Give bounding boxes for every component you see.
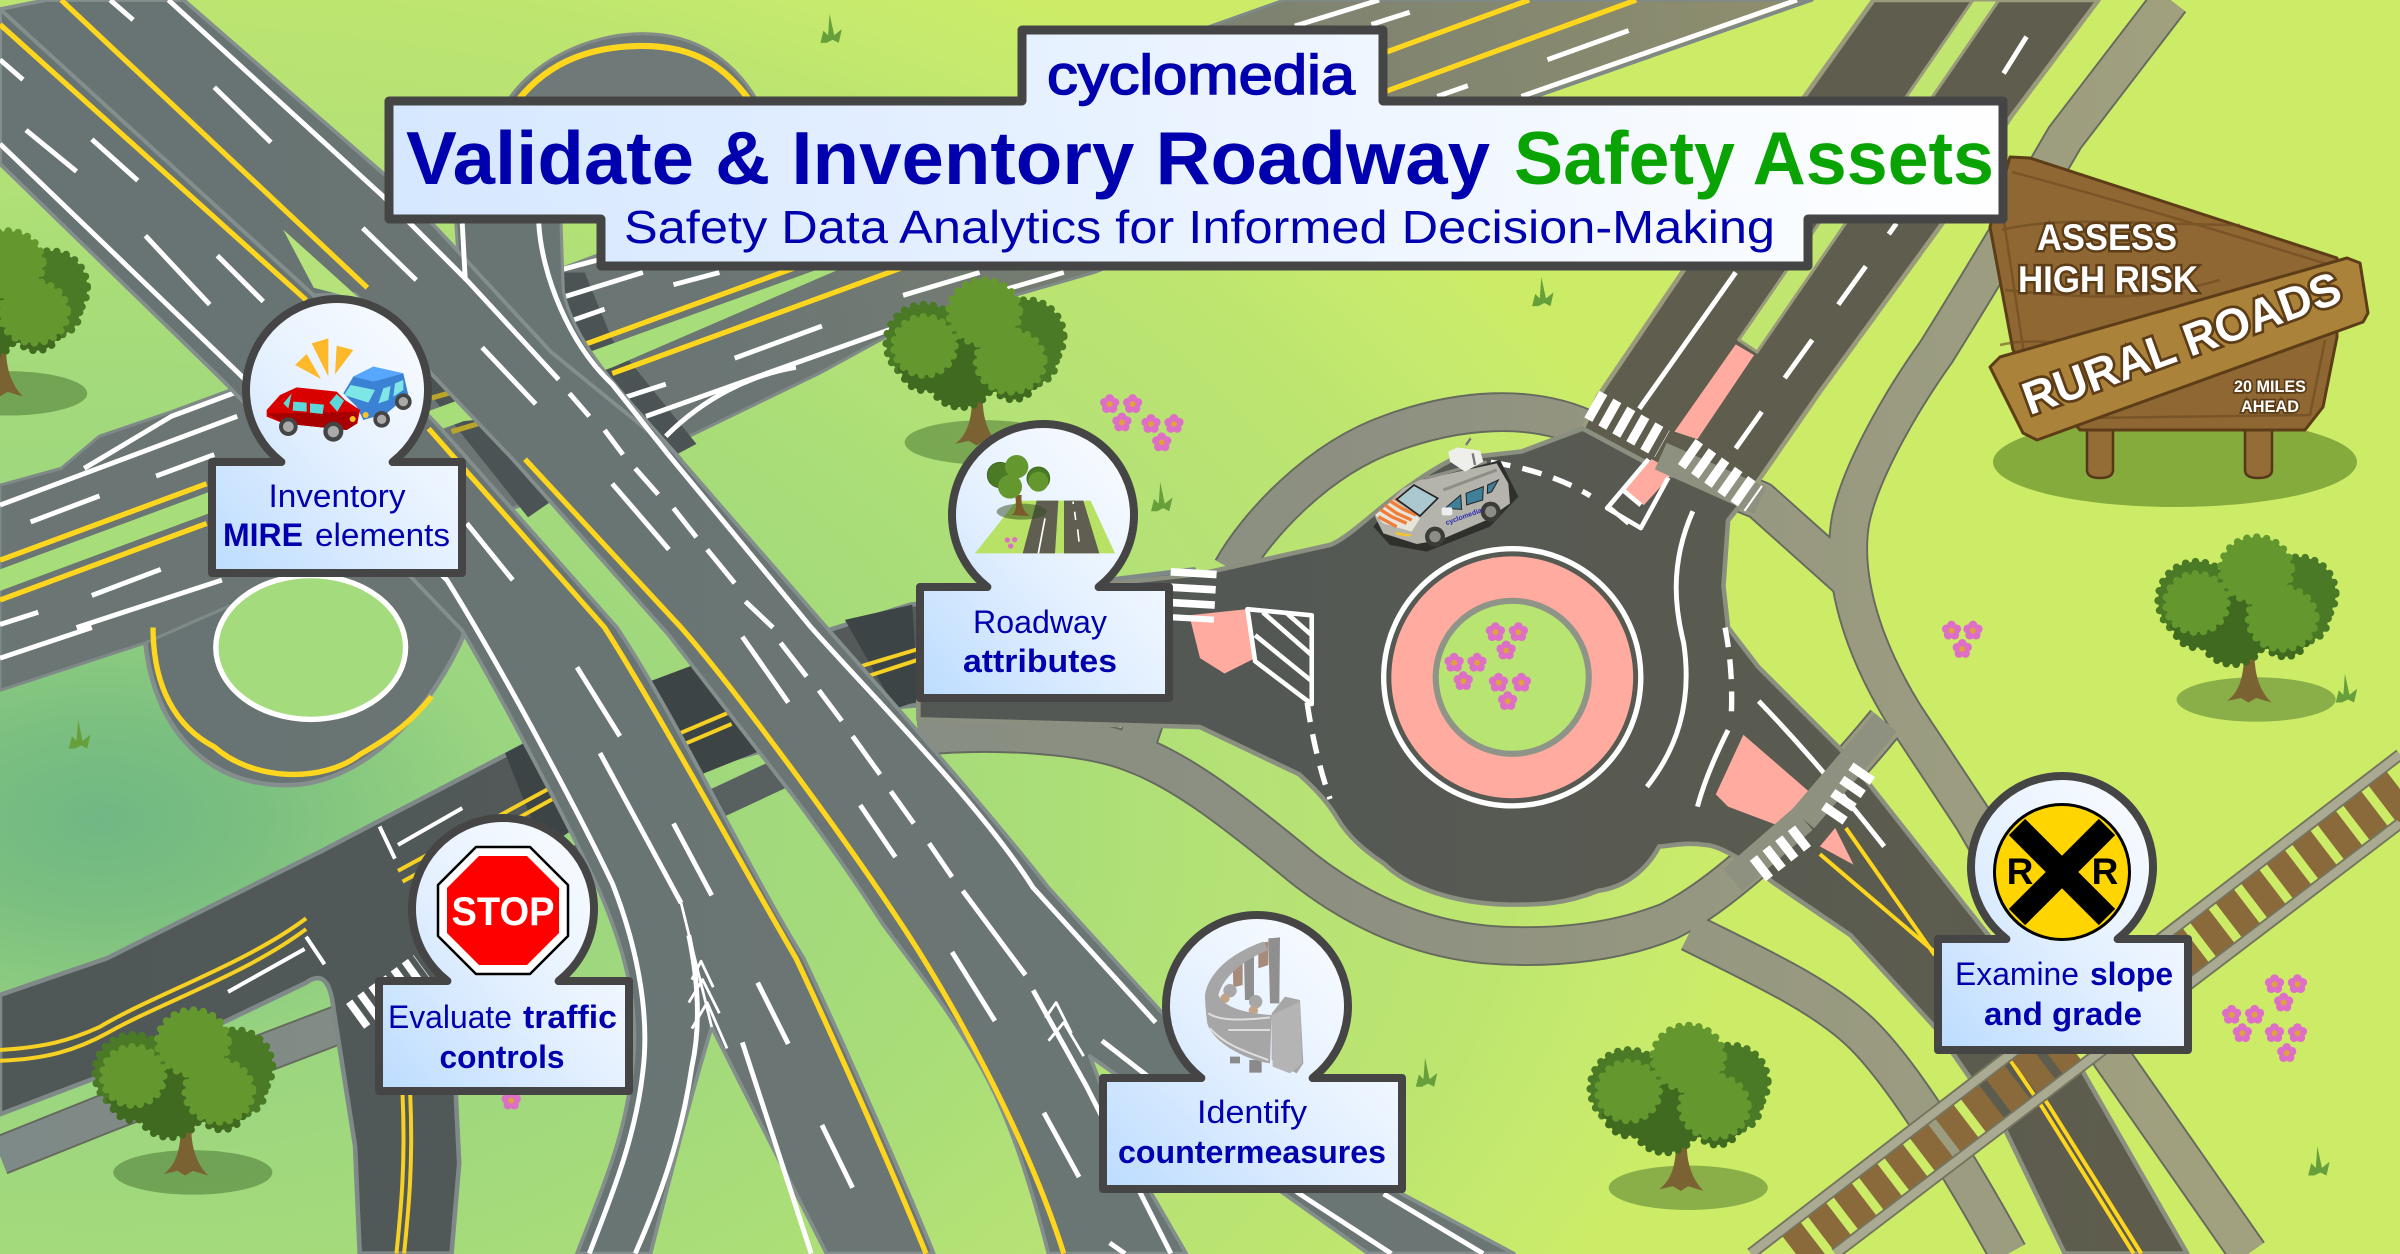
north approach road — [1561, 0, 2098, 520]
sign board — [1990, 157, 2337, 430]
highway B lane markings — [0, 0, 1797, 658]
sign text upper: ASSESS — [2037, 217, 2177, 258]
loop ramp inner green — [216, 576, 406, 719]
median sliver — [283, 230, 361, 300]
arch yellow edge — [517, 46, 750, 101]
sign small text: AHEAD — [2241, 397, 2299, 416]
arterial shadow under highway — [505, 605, 918, 849]
arterial crosswalk — [355, 967, 422, 1016]
main heading blue: Validate & Inventory Roadway — [406, 116, 1490, 200]
highway yellow lines — [0, 0, 1064, 1254]
card: Inventory MIRE elements — [212, 299, 462, 573]
ramp down to highway — [452, 153, 681, 459]
lower sidewalk under overpass — [579, 770, 788, 860]
north approach median — [1739, 0, 1999, 352]
icon: stop sign — [438, 847, 568, 974]
sign small text — [2234, 377, 2306, 416]
shaded yellow lines under overpass — [432, 392, 482, 432]
highway B median — [0, 222, 949, 591]
highway B yellow lines — [0, 0, 1636, 600]
card: Evaluate traffic controls: controls — [440, 1039, 564, 1075]
pink splitter islands — [1189, 344, 1854, 865]
card: Identify countermeasures: countermeasures — [1118, 1134, 1386, 1170]
title panel — [389, 30, 2003, 266]
loop ramp — [145, 536, 467, 785]
icon: railroad crossing sign — [1994, 804, 2130, 940]
card: Inventory MIRE elements: MIRE — [223, 517, 303, 553]
icon: car crash — [267, 338, 412, 442]
card text: Roadway — [973, 604, 1107, 640]
board wood grain — [2000, 172, 2330, 418]
brand name: cyclomedia — [1047, 43, 1356, 106]
highway B overpass shadows — [421, 272, 696, 517]
icon: stop sign: STOP — [452, 890, 554, 934]
arterial white markings — [228, 808, 462, 992]
card text: Inventory — [268, 478, 406, 514]
cross road: dark arterial — [0, 569, 1209, 1254]
card: Roadway attributes — [920, 424, 1169, 698]
highway dashes — [0, 0, 1125, 1254]
flower clusters — [502, 394, 2307, 1109]
card: Examine slope and grade: slope — [2090, 956, 2173, 992]
survey vehicle: cyclomedia — [1445, 507, 1483, 527]
icon: railroad crossing sign: R — [2007, 851, 2033, 892]
hatched splitter markings — [1247, 459, 1668, 704]
card text: Examine — [1955, 956, 2079, 992]
sign legs — [2087, 425, 2272, 478]
highway white edges — [0, 0, 1483, 1254]
card text: Evaluate — [388, 999, 512, 1035]
gore chevrons — [681, 903, 1084, 1056]
card: Inventory MIRE elements: elements — [315, 517, 450, 553]
sidewalk crossing bands — [1661, 456, 1886, 880]
survey vehicle — [1373, 438, 1518, 552]
north road dashes — [1736, 37, 2027, 448]
icon: crash cushion — [1205, 937, 1303, 1073]
card text: Identify — [1197, 1094, 1307, 1130]
central island — [1384, 549, 1641, 806]
card: Examine slope and grade — [1938, 776, 2188, 1050]
crosswalks — [1592, 404, 1754, 499]
card: Evaluate traffic controls: traffic — [523, 999, 617, 1035]
plank text: RURAL ROADS — [2015, 261, 2348, 425]
card: Examine slope and grade: and grade — [1984, 996, 2142, 1032]
icon: railroad crossing sign: R — [2092, 851, 2118, 892]
icon: road scene — [975, 455, 1115, 553]
sign plank — [1990, 258, 2368, 440]
sign text middle: HIGH RISK — [2018, 259, 2198, 300]
main heading green: Safety Assets — [1514, 116, 1994, 200]
roundabout lane markings — [1639, 272, 1884, 846]
sign shadow — [1993, 417, 2357, 507]
wooden sign — [1990, 157, 2368, 507]
subtitle: Safety Data Analytics for Informed Decision-Making — [624, 201, 1775, 253]
sign small text: 20 MILES — [2234, 377, 2306, 396]
highway east carriageway — [0, 0, 1514, 1254]
arterial double yellow lines — [0, 649, 918, 1254]
highway west carriageway — [0, 9, 934, 1254]
card: Evaluate traffic controls — [379, 818, 629, 1091]
roundabout pavement — [918, 429, 2187, 1254]
top arch ramp — [502, 34, 762, 168]
southeast road double yellow — [1820, 828, 2141, 1254]
card: Identify countermeasures — [1103, 915, 1402, 1189]
title box — [389, 30, 2003, 266]
card: Roadway attributes: attributes — [963, 643, 1117, 679]
highway B east-west — [0, 0, 1812, 690]
trees — [0, 231, 2336, 1210]
loop ramp yellow edge — [153, 628, 432, 774]
railway track — [1751, 755, 2400, 1254]
